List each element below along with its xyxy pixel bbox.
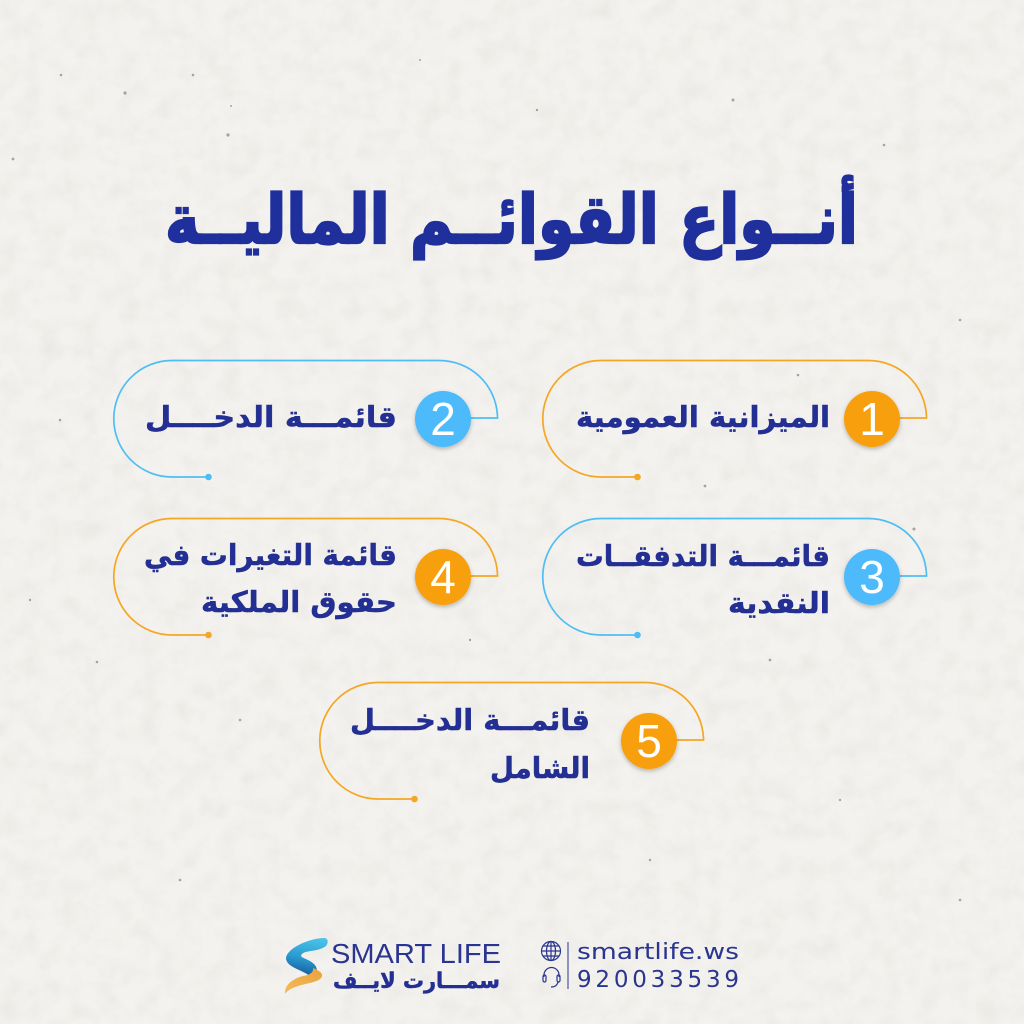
card 5: comprehensive income: قائمـــة الدخــــل xyxy=(350,703,590,737)
card 3: cash flow statement xyxy=(543,518,926,638)
logo: Smart Life: SMART LIFE xyxy=(331,938,501,969)
card 4: changes in equity: قائمة التغيرات في xyxy=(144,538,397,572)
card 1: balance sheet: الميزانية العمومية xyxy=(576,400,830,434)
icon: S swoosh xyxy=(285,938,328,994)
card 5: comprehensive income: 5 xyxy=(636,715,662,767)
card 2: income statement xyxy=(114,360,497,480)
card 5: comprehensive income xyxy=(320,682,704,802)
card 1: balance sheet xyxy=(543,360,926,480)
contact block: 920033539 xyxy=(577,967,739,993)
logo: Smart Life: سمـــارت لايــف xyxy=(333,969,500,994)
card 1: balance sheet: 1 xyxy=(859,393,885,445)
card 2: income statement: 2 xyxy=(430,393,456,445)
title: أنــواع القوائــم الماليــة xyxy=(165,175,858,260)
contact block xyxy=(542,940,739,993)
icon: globe xyxy=(542,942,560,960)
card 4: changes in equity: 4 xyxy=(430,551,456,603)
card 4: changes in equity xyxy=(114,518,497,638)
card 3: cash flow statement: قائمـــة التدفقــات xyxy=(576,539,830,573)
logo: Smart Life xyxy=(285,938,501,994)
card 2: income statement: قائمـــة الدخــــل xyxy=(145,400,397,434)
icon: headset xyxy=(543,968,560,987)
contact block: smartlife.ws xyxy=(577,940,739,965)
card 4: changes in equity: حقوق الملكية xyxy=(201,585,397,619)
card 3: cash flow statement: 3 xyxy=(859,551,885,603)
card 3: cash flow statement: النقدية xyxy=(728,586,830,620)
card 5: comprehensive income: الشامل xyxy=(490,751,590,785)
